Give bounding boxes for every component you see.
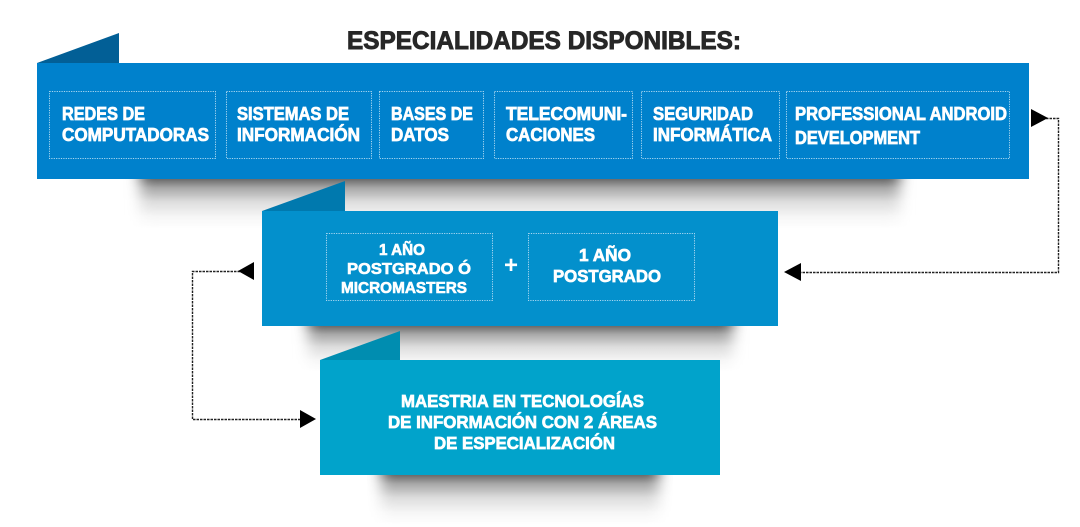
specialty: sistemas de información: SISTEMAS DE [237,104,349,124]
title: ESPECIALIDADES DISPONIBLES: [347,27,741,55]
box: 1 año postgrado: POSTGRADO [553,266,661,286]
shadow under second banner [308,326,733,372]
shadow under first banner [140,179,900,229]
arrow: specialties to postgraduate [784,109,1058,281]
specialty: redes de computadoras: COMPUTADORAS [62,125,209,145]
arrow: postgraduate to master [192,262,316,428]
specialty: redes de computadoras [50,92,216,158]
banner fold [320,331,400,360]
master degree text: DE ESPECIALIZACIÓN [434,432,615,453]
specialty: seguridad informática: SEGURIDAD [653,104,753,124]
specialty: professional android development: DEVELOPMENT [795,128,920,148]
master degree text [388,390,657,453]
box: 1 año postgrado o micromasters [326,234,492,300]
specialty: bases de datos: DATOS [391,125,449,145]
specialty: redes de computadoras: REDES DE [62,104,145,124]
specialty: bases de datos [380,92,484,158]
box: 1 año postgrado o micromasters: 1 AÑO [379,241,425,259]
specialty: seguridad informática [642,92,780,158]
specialty: telecomunicaciones: TELECOMUNI- [506,104,627,124]
panel: postgraduate banner [262,181,778,326]
specialty: sistemas de información [226,92,372,158]
master degree text: DE INFORMACIÓN CON 2 ÁREAS [388,411,657,432]
plus sign: + [504,252,518,279]
box: 1 año postgrado o micromasters: MICROMASTERS [341,280,467,297]
specialty: professional android development: PROFESSIONAL ANDROID [795,104,1007,124]
banner body [320,360,720,475]
specialty: bases de datos: BASES DE [391,104,473,124]
panel: specialties banner [37,33,1029,179]
master degree text: MAESTRIA EN TECNOLOGÍAS [401,390,644,411]
specialty: sistemas de información: INFORMACIÓN [237,124,360,145]
box: 1 año postgrado [528,234,694,300]
panel: master degree banner [320,331,720,475]
specialty: telecomunicaciones [494,92,632,158]
box: 1 año postgrado o micromasters: POSTGRADO Ó [347,260,471,278]
banner body [262,211,778,326]
box: 1 año postgrado: 1 AÑO [579,244,631,265]
specialty: telecomunicaciones: CACIONES [506,125,595,145]
shadow under third banner [381,475,659,525]
banner body [37,63,1029,179]
banner fold [37,33,119,63]
banner fold [262,181,345,211]
specialty: professional android development [786,92,1010,158]
specialty: seguridad informática: INFORMÁTICA [653,124,772,145]
